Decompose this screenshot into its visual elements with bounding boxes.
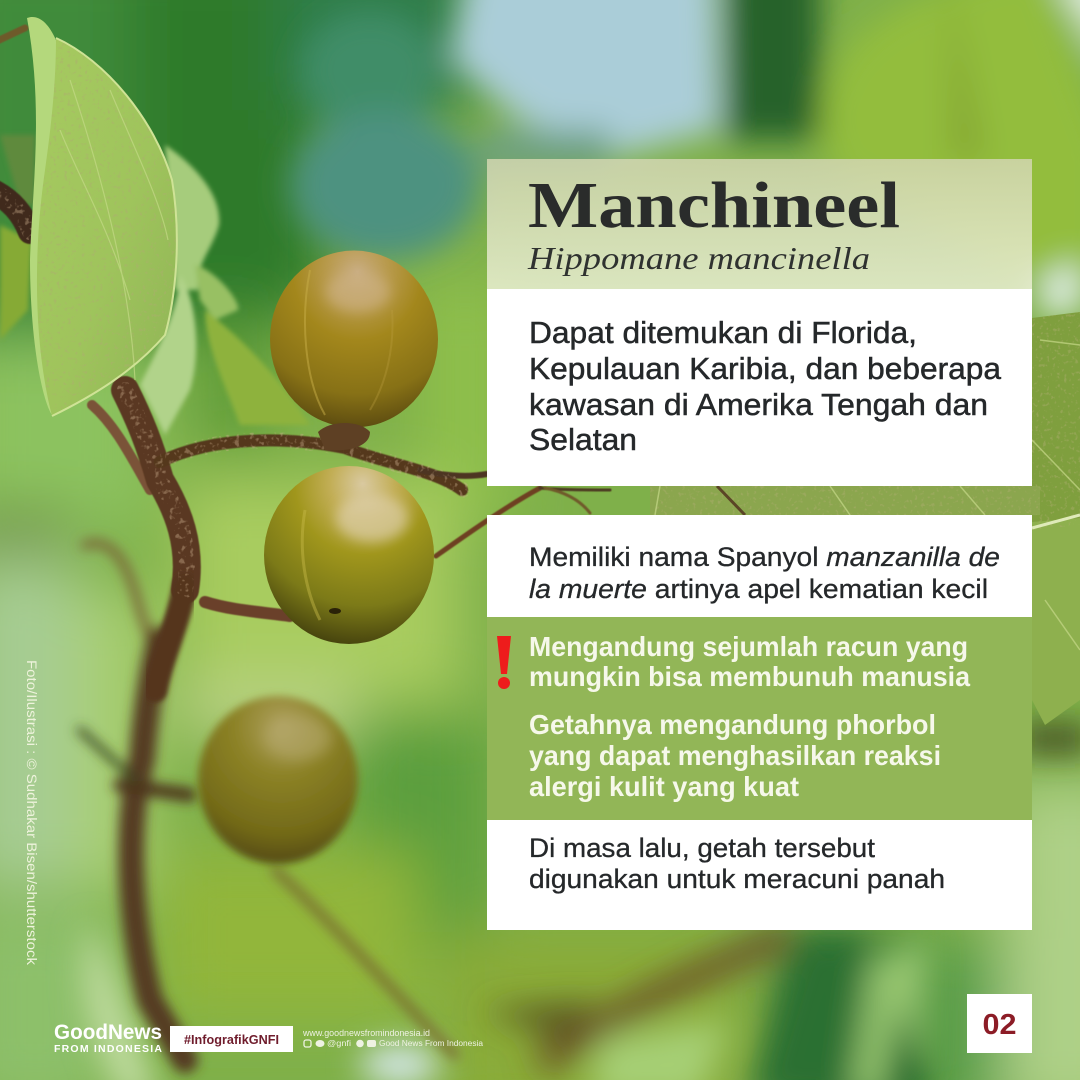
icon: exclamation mark xyxy=(497,636,511,689)
large leaf upper left xyxy=(27,17,177,416)
panel: poison warning: Mengandung sejumlah racun yang xyxy=(529,631,968,662)
panel: distribution: Dapat ditemukan di Florida, xyxy=(529,315,917,350)
panel: title xyxy=(487,159,1032,289)
icon: twitter xyxy=(316,1040,324,1047)
fruit stem knot xyxy=(318,423,370,450)
panel: arrow poison history: Di masa lalu, getah tersebut xyxy=(529,833,876,863)
page number: 02 xyxy=(982,1009,1016,1041)
photo credit: Foto/Ilustrasi : © Sudhakar Bisen/shutterstock xyxy=(24,660,39,965)
panel: distribution: Selatan xyxy=(529,422,637,457)
panel: spanish name: la muerte artinya apel kematian kecil xyxy=(529,574,988,604)
footer logo: GoodNews from Indonesia: FROM INDONESIA xyxy=(54,1043,162,1055)
icon: instagram xyxy=(304,1040,311,1047)
page number xyxy=(967,994,1032,1053)
footer links and social: Good News From Indonesia xyxy=(379,1039,484,1048)
small leaves behind main leaf xyxy=(0,135,310,435)
panel: distribution xyxy=(487,289,1032,486)
panel: distribution: Kepulauan Karibia, dan beberapa xyxy=(529,351,1002,386)
fruit: upper xyxy=(270,250,438,428)
panel: arrow poison history xyxy=(487,820,1032,930)
scientific name: Hippomane mancinella xyxy=(527,240,870,276)
fruit: lower blurred xyxy=(198,696,358,864)
footer links and social: @gnfi xyxy=(327,1039,351,1048)
fruit: middle xyxy=(264,466,434,644)
panel: poison warning xyxy=(487,617,1032,820)
icon: facebook xyxy=(356,1040,364,1047)
footer links and social: www.goodnewsfromindonesia.id xyxy=(302,1028,430,1038)
hashtag badge: #InfografikGNFI xyxy=(184,1032,279,1047)
footer logo: GoodNews from Indonesia xyxy=(54,1021,162,1055)
right-side leaf behind panels xyxy=(650,312,1080,725)
footer links and social xyxy=(302,1028,484,1048)
panel: spanish name: Memiliki nama Spanyol manzanilla de xyxy=(529,542,1000,572)
panel: poison warning: Getahnya mengandung phorbol xyxy=(529,709,936,740)
panel: poison warning: alergi kulit yang kuat xyxy=(529,771,799,802)
panel: distribution: kawasan di Amerika Tengah dan xyxy=(529,387,988,422)
panel: arrow poison history: digunakan untuk meracuni panah xyxy=(529,864,945,894)
panel: spanish name xyxy=(487,515,1032,617)
hashtag badge xyxy=(170,1026,293,1052)
panel: poison warning: yang dapat menghasilkan reaksi xyxy=(529,740,941,771)
icon: youtube xyxy=(367,1040,376,1047)
branches xyxy=(0,28,610,1060)
panel: poison warning: mungkin bisa membunuh manusia xyxy=(529,661,970,692)
title: Manchineel xyxy=(528,169,900,242)
footer logo: GoodNews from Indonesia: GoodNews xyxy=(54,1021,162,1044)
